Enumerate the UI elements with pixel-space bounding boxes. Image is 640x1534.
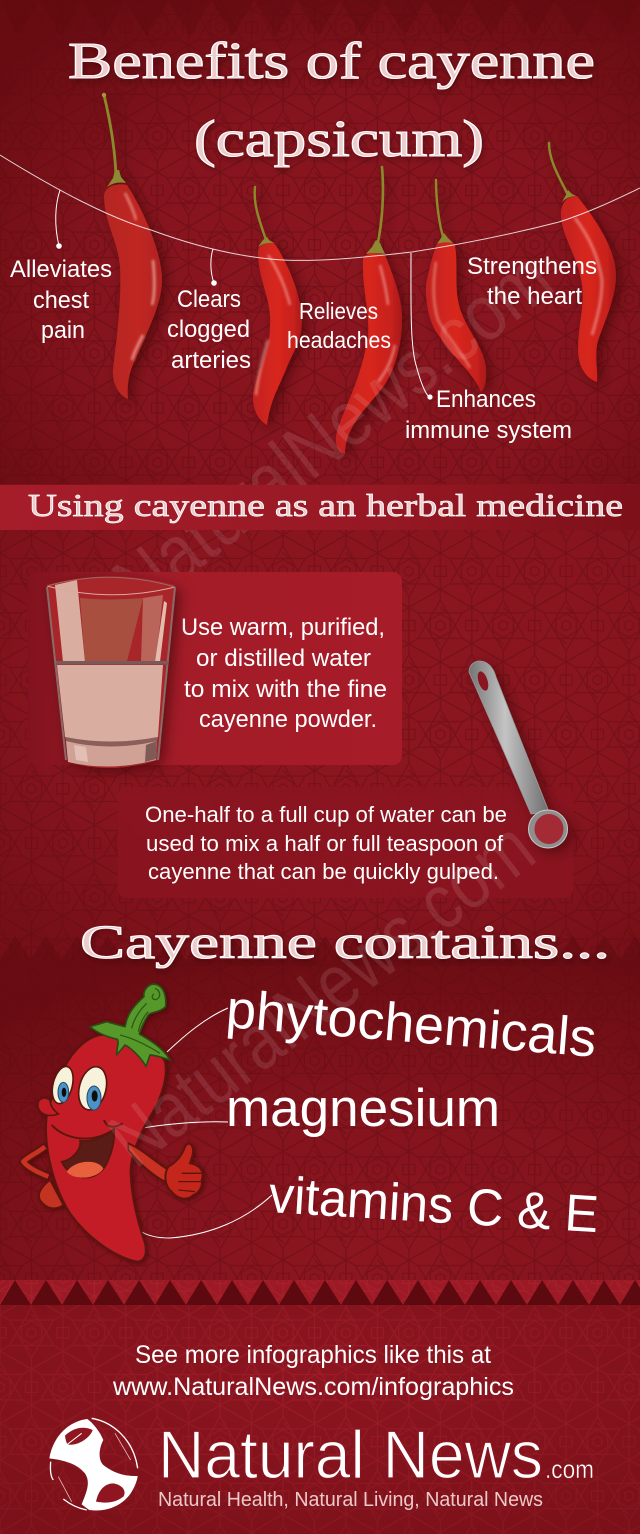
label: clears clogged arteries: clogged bbox=[167, 316, 250, 343]
panel: dosage instruction: One-half to a full cup of water can be bbox=[145, 802, 507, 827]
section band heading: Using cayenne as an herbal medicine bbox=[28, 487, 623, 523]
panel: water instruction: or distilled water bbox=[196, 645, 371, 672]
watermark: lower: NaturalNews.com bbox=[92, 803, 550, 1183]
nutrient: vitamins: vitamins C & E bbox=[267, 1166, 600, 1244]
label: relieves headaches: Relieves bbox=[299, 298, 378, 324]
label: alleviates chest pain: Alleviates bbox=[10, 256, 112, 283]
logo: Natural News wordmark: .com bbox=[545, 1454, 594, 1484]
label: relieves headaches bbox=[287, 298, 391, 353]
label: enhances immune system: immune system bbox=[405, 417, 572, 444]
logo: Natural News wordmark: Natural News bbox=[158, 1417, 543, 1493]
label: relieves headaches: headaches bbox=[287, 327, 391, 353]
icon: glass of water bbox=[47, 576, 175, 768]
icon: cartoon chili mascot bbox=[23, 984, 203, 1262]
panel: dosage instruction: cayenne that can be quickly gulped. bbox=[148, 859, 499, 884]
label: alleviates chest pain: chest bbox=[33, 287, 89, 314]
title bbox=[68, 33, 595, 168]
label: strengthens the heart: the heart bbox=[487, 283, 582, 310]
nutrient: phytochemicals: phytochemicals bbox=[224, 979, 599, 1069]
label: alleviates chest pain bbox=[10, 256, 112, 344]
logo: Natural News wordmark: Natural Health, Natural Living, Natural News bbox=[158, 1489, 543, 1511]
label: enhances immune system: Enhances bbox=[436, 386, 536, 413]
footer call to action bbox=[112, 1341, 514, 1401]
connector lines to nutrients bbox=[142, 1008, 272, 1238]
label: strengthens the heart: Strengthens bbox=[467, 253, 597, 280]
label: clears clogged arteries bbox=[167, 286, 251, 374]
title: Benefits of cayenne bbox=[68, 33, 595, 90]
panel: water instruction: cayenne powder. bbox=[199, 706, 377, 733]
footer call to action: www.NaturalNews.com/infographics bbox=[112, 1373, 514, 1401]
label: alleviates chest pain: pain bbox=[41, 317, 85, 344]
label: clears clogged arteries: Clears bbox=[177, 286, 241, 313]
panel: water instruction: Use warm, purified, bbox=[181, 614, 385, 641]
logo: globe bbox=[49, 1418, 138, 1511]
icon: measuring spoon bbox=[469, 661, 568, 848]
panel: water instruction bbox=[28, 572, 402, 765]
label: strengthens the heart bbox=[467, 253, 597, 310]
label: enhances immune system bbox=[405, 386, 572, 444]
string and callout lines bbox=[0, 155, 640, 397]
nutrient: magnesium: magnesium bbox=[226, 1079, 500, 1138]
panel: water instruction: to mix with the fine bbox=[184, 676, 387, 703]
callout dots bbox=[56, 243, 433, 400]
panel: dosage instruction: used to mix a half or full teaspoon of bbox=[146, 831, 504, 856]
section band heading bbox=[0, 485, 640, 530]
watermark: top: NaturalNews.com bbox=[96, 233, 568, 628]
title: (capsicum) bbox=[194, 111, 484, 168]
label: clears clogged arteries: arteries bbox=[171, 347, 251, 374]
heading: cayenne contains: Cayenne contains... bbox=[80, 916, 610, 969]
footer call to action: See more infographics like this at bbox=[135, 1341, 491, 1369]
panel: dosage instruction bbox=[118, 787, 573, 898]
chili peppers hanging on string bbox=[102, 93, 616, 454]
